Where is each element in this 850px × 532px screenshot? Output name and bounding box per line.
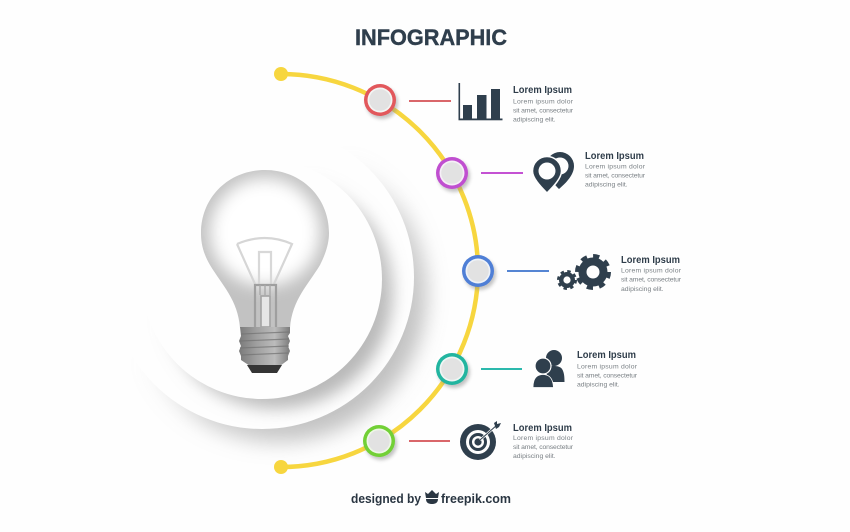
infographic xyxy=(162,29,681,506)
text block: sit amet, consectetur xyxy=(585,172,646,180)
text block xyxy=(585,151,646,188)
text block: Lorem ipsum dolor xyxy=(577,364,638,370)
node blue xyxy=(462,255,496,290)
node green xyxy=(363,425,397,460)
concentric white discs with shadows xyxy=(110,125,427,442)
item 5: target xyxy=(363,421,574,460)
text block xyxy=(577,350,638,388)
arc end dot xyxy=(274,460,288,474)
footer credit: freepik.com xyxy=(441,491,511,506)
text block xyxy=(513,423,574,460)
item 2: location xyxy=(436,151,646,193)
text block: adipiscing elit. xyxy=(585,182,628,188)
text block xyxy=(513,85,574,124)
node purple xyxy=(436,157,470,192)
text block: Lorem Ipsum xyxy=(621,255,680,266)
text block: Lorem Ipsum xyxy=(577,350,636,361)
filament xyxy=(237,238,292,327)
connector xyxy=(409,100,451,102)
text block: Lorem Ipsum xyxy=(513,423,572,434)
connector xyxy=(481,172,523,174)
arc start dot xyxy=(274,67,288,81)
text block: Lorem ipsum dolor xyxy=(621,268,682,274)
text block: Lorem Ipsum xyxy=(585,151,644,162)
connector xyxy=(507,270,549,272)
text block: adipiscing elit. xyxy=(621,286,664,293)
icon: target xyxy=(460,421,501,460)
node teal xyxy=(436,353,470,388)
text block: Lorem ipsum dolor xyxy=(513,435,574,442)
icon: bar chart xyxy=(458,83,502,120)
text block: adipiscing elit. xyxy=(577,382,620,388)
base tip xyxy=(247,365,282,373)
item 1: chart xyxy=(364,83,574,124)
bulb glass xyxy=(201,170,329,328)
screw base xyxy=(239,327,290,366)
text block: sit amet, consectetur xyxy=(621,276,682,284)
title: INFOGRAPHIC xyxy=(355,25,507,50)
connector xyxy=(409,440,450,442)
item 4: people xyxy=(436,350,638,388)
yellow arc xyxy=(281,74,478,467)
icon: people xyxy=(533,350,564,388)
node red xyxy=(364,84,398,119)
icon: gears xyxy=(558,256,608,289)
connector xyxy=(481,368,522,370)
text block: sit amet, consectetur xyxy=(513,444,574,451)
text block: adipiscing elit. xyxy=(513,116,556,124)
light bulb xyxy=(201,170,329,373)
text block: Lorem ipsum dolor xyxy=(585,164,646,170)
text block: sit amet, consectetur xyxy=(513,108,574,114)
icon: map pins xyxy=(532,152,574,193)
text block: Lorem Ipsum xyxy=(513,85,572,96)
footer credit xyxy=(351,490,511,506)
footer credit: designed by xyxy=(351,491,422,506)
text block: adipiscing elit. xyxy=(513,453,556,460)
text block xyxy=(621,255,682,293)
icon: freepik crown xyxy=(425,490,439,504)
item 3: settings xyxy=(462,255,682,293)
text block: sit amet, consectetur xyxy=(577,372,638,380)
text block: Lorem ipsum dolor xyxy=(513,98,574,106)
